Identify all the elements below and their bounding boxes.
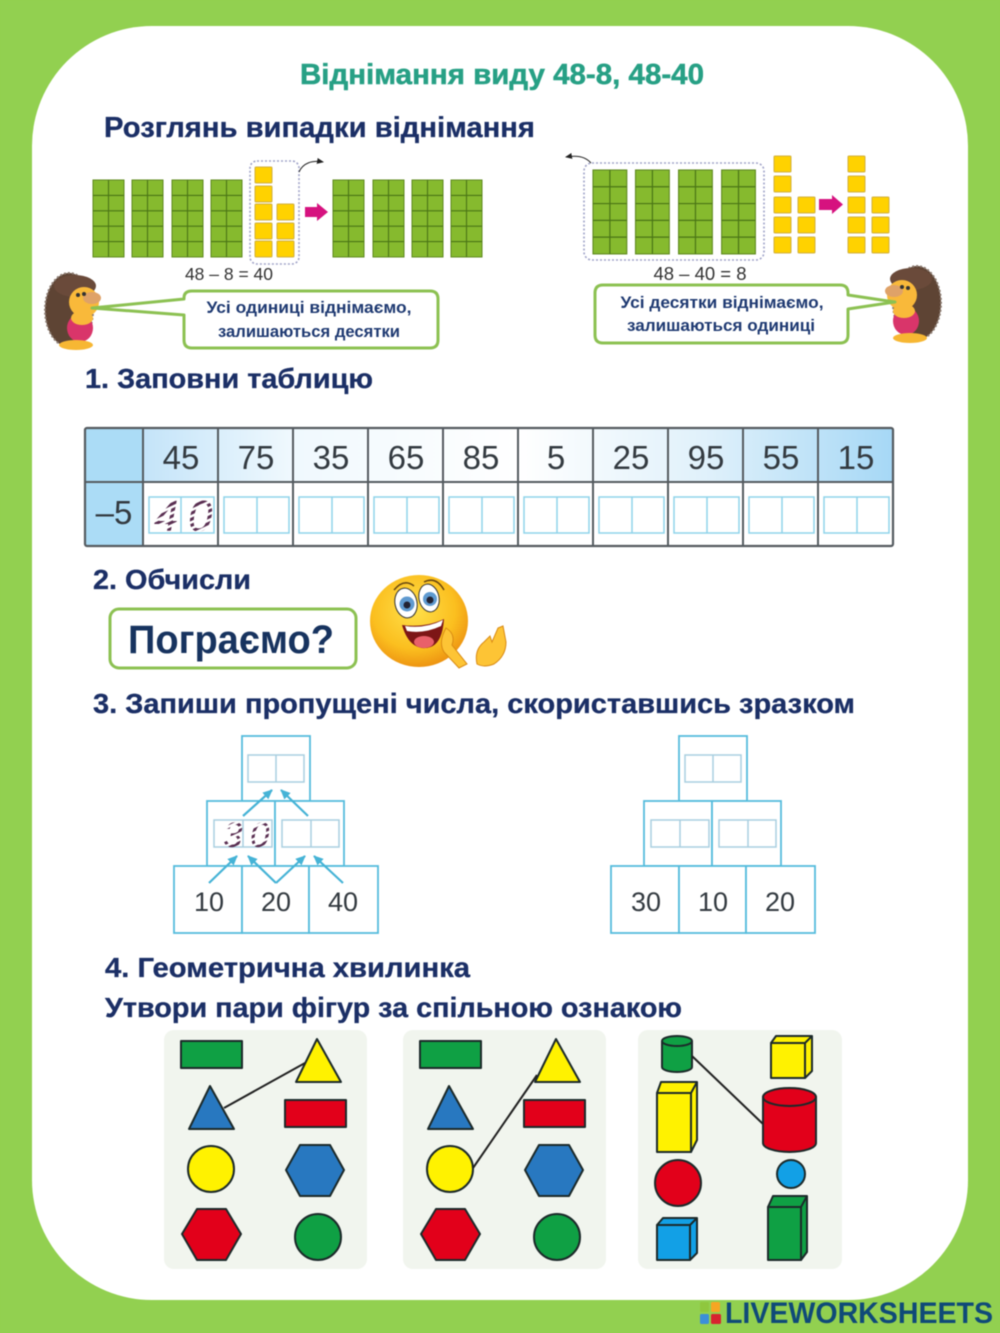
heading: task 1: 1. Заповни таблицю — [85, 363, 373, 394]
header numbers: 55 — [763, 439, 799, 476]
tens blocks after — [333, 180, 482, 257]
curved arrow — [299, 161, 323, 172]
row label background — [85, 428, 143, 546]
callout: left bubble — [92, 291, 438, 348]
pink arrow — [819, 195, 843, 214]
panel: flat shapes pair by colour — [403, 1030, 606, 1269]
logo wordmark: LIVEWORKSHEETS — [725, 1297, 993, 1330]
icon: hedgehog left — [45, 273, 101, 350]
heading: task 2: 2. Обчисли — [93, 564, 251, 595]
numbers: 30 — [631, 887, 661, 917]
icon: smiling emoji — [370, 575, 506, 668]
unit squares after — [848, 156, 889, 253]
dotted selection around tens — [584, 163, 764, 260]
button: let's play: Пограємо? — [128, 618, 334, 662]
header numbers: 35 — [313, 439, 349, 476]
panel: flat shapes pair by shape — [164, 1030, 367, 1269]
pyramid: exercise — [611, 736, 815, 933]
header numbers: 25 — [613, 439, 649, 476]
numbers: 40 — [328, 887, 358, 917]
header numbers: 85 — [463, 439, 499, 476]
subheading: task 4 instruction: Утвори пари фігур за спільною ознакою — [105, 992, 682, 1023]
panel: example 48-40 — [566, 156, 889, 284]
title: Віднімання виду 48-8, 48-40 — [300, 59, 704, 91]
dashed sample answer — [223, 816, 270, 855]
arrows — [209, 790, 343, 883]
cheek hand — [441, 628, 467, 668]
header numbers: 75 — [238, 439, 274, 476]
yellow tall box — [657, 1082, 697, 1152]
curved arrow — [566, 156, 591, 163]
connecting line — [224, 1063, 305, 1108]
header numbers: 45 — [163, 439, 199, 476]
row label: –5 — [96, 494, 132, 531]
numbers — [194, 887, 358, 917]
callout: right bubble — [595, 285, 895, 343]
heading: task 3: 3. Запиши пропущені числа, скориставшись зразком — [93, 688, 855, 719]
icon: hedgehog right — [885, 266, 941, 343]
numbers: 10 — [698, 887, 728, 917]
connecting line — [473, 1075, 537, 1168]
tens blocks — [593, 170, 755, 254]
callout text: Усі десятки віднімаємо, — [620, 293, 824, 312]
blue sphere — [777, 1160, 805, 1188]
red cylinder — [763, 1088, 816, 1152]
input cells row 2 — [149, 497, 889, 533]
table: fill in — [85, 428, 893, 546]
callout text: залишаються одиниці — [627, 316, 815, 335]
header numbers: 95 — [688, 439, 724, 476]
waving hand — [476, 626, 506, 666]
header gradient — [143, 428, 893, 482]
equation: 48 – 8 = 40 — [185, 264, 273, 284]
dotted selection around units — [250, 161, 299, 264]
equation: 48 – 40 = 8 — [653, 263, 747, 284]
dashed sample answer: 3 — [223, 816, 243, 855]
header numbers: 65 — [388, 439, 424, 476]
connecting line — [692, 1056, 763, 1124]
blue cube — [657, 1218, 697, 1260]
logo tiles — [700, 1302, 721, 1324]
header numbers: 15 — [838, 439, 874, 476]
numbers: 10 — [194, 887, 224, 917]
green cylinder — [662, 1036, 692, 1072]
unit squares before — [774, 156, 815, 253]
callout text — [620, 293, 824, 335]
table grid — [85, 428, 893, 546]
heading: task 4: 4. Геометрична хвилинка — [105, 952, 470, 983]
green tall box — [768, 1196, 807, 1260]
button: let's play — [110, 609, 356, 668]
red sphere — [655, 1160, 701, 1206]
numbers — [631, 887, 795, 917]
pyramid: sample — [174, 736, 378, 933]
numbers: 20 — [765, 887, 795, 917]
dashed sample answer: 4 — [154, 492, 178, 541]
logo: liveworksheets — [700, 1297, 993, 1330]
pink arrow — [305, 203, 328, 221]
tens blocks before — [93, 180, 242, 257]
dashed sample answer: 0 — [250, 816, 270, 855]
callout text: Усі одиниці віднімаємо, — [206, 298, 412, 317]
dashed sample answer: 0 — [188, 492, 213, 541]
header numbers — [163, 439, 874, 476]
yellow cube — [771, 1036, 812, 1078]
dashed sample answer — [154, 492, 213, 541]
numbers: 20 — [261, 887, 291, 917]
panel: solid shapes — [638, 1030, 842, 1269]
heading: look at subtraction cases: Розглянь випадки віднімання — [104, 112, 535, 144]
callout text: залишаються десятки — [218, 322, 400, 341]
header numbers: 5 — [547, 439, 565, 476]
unit squares — [255, 167, 294, 257]
callout text — [206, 298, 412, 341]
panel: example 48-8 — [93, 161, 482, 284]
